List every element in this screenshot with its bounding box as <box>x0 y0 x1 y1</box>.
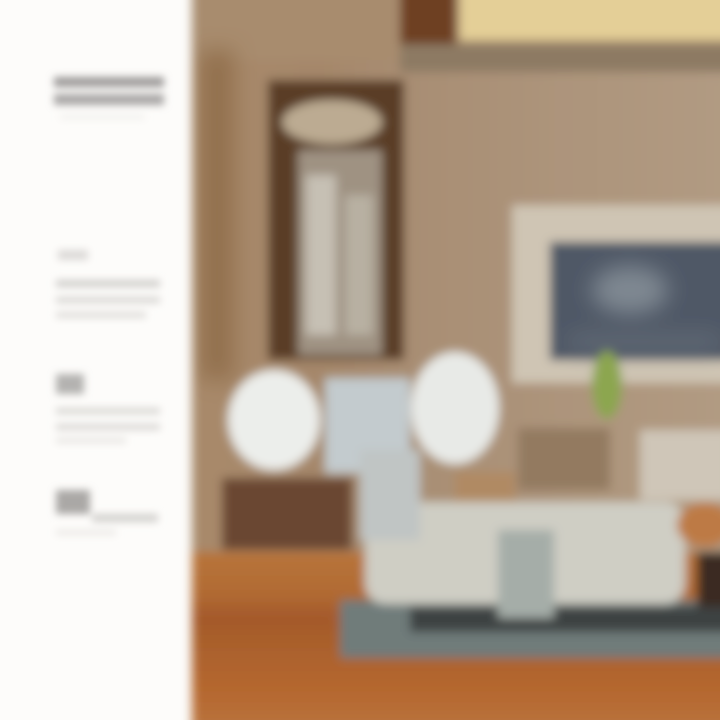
ceiling beam <box>170 0 720 72</box>
floor <box>170 552 720 720</box>
text block: section two <box>56 374 160 443</box>
green plant <box>592 351 622 419</box>
heading <box>54 77 164 119</box>
text block: section one <box>56 250 160 318</box>
wall art <box>512 205 720 383</box>
cushions <box>455 428 720 502</box>
coffee table <box>677 503 720 607</box>
sideboard <box>222 478 352 550</box>
sofa <box>360 450 685 618</box>
rug <box>340 600 720 658</box>
text block: section three <box>56 490 158 535</box>
bookcase <box>268 80 404 360</box>
photo: living room scene <box>170 0 720 720</box>
panel: white text sidebar <box>0 0 192 720</box>
left wall column <box>200 50 234 380</box>
white chairs and cushions <box>228 352 499 473</box>
